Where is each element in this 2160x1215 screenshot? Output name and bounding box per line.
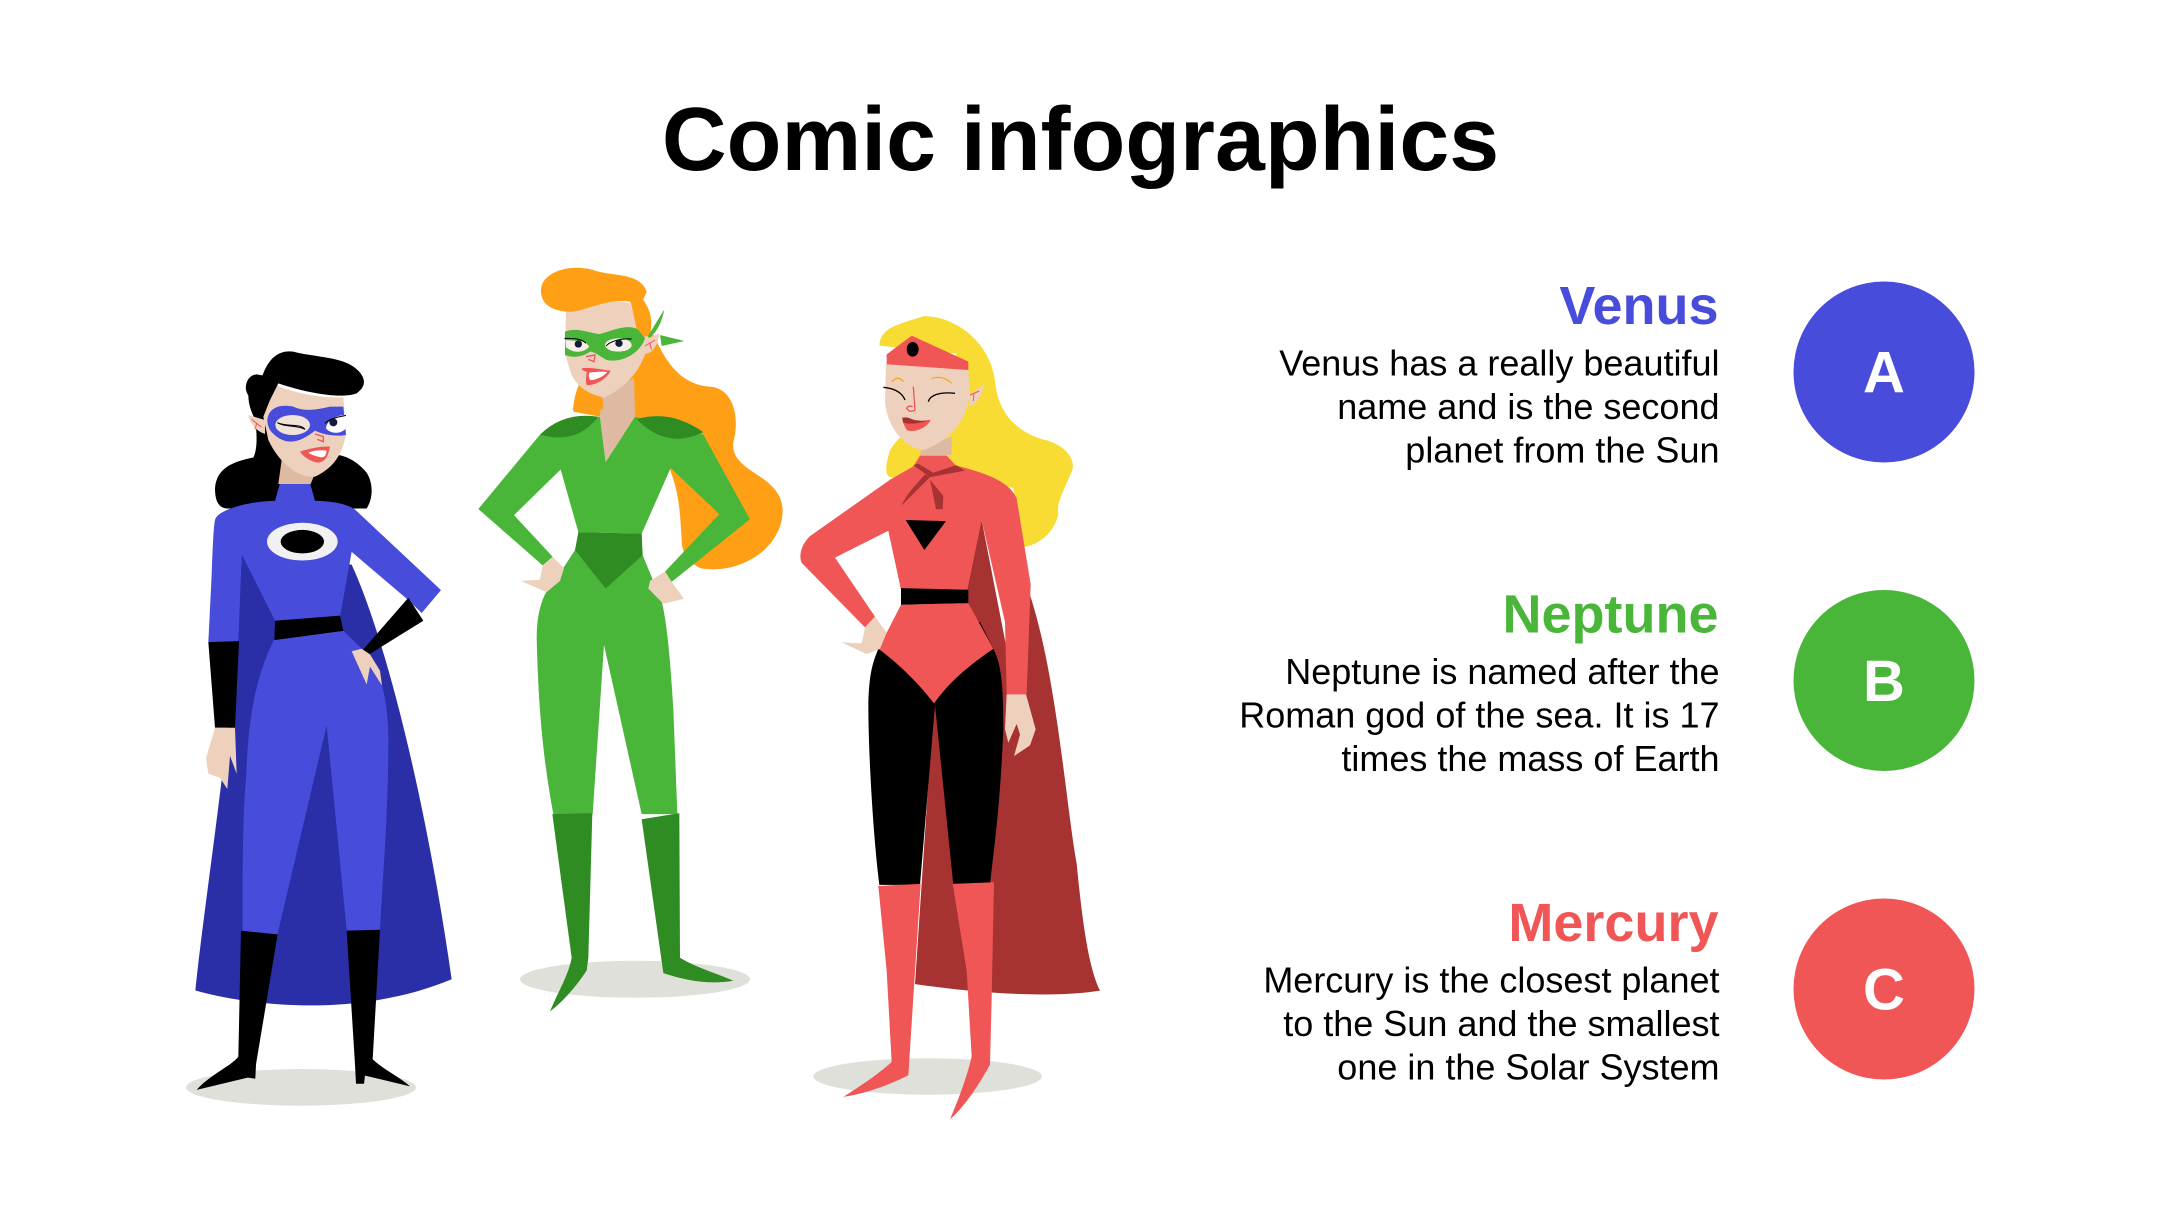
cape xyxy=(195,554,452,1005)
suit top xyxy=(208,483,441,642)
heading: Mercury xyxy=(1508,893,1718,953)
belt xyxy=(575,532,643,589)
belt xyxy=(274,616,343,640)
boots xyxy=(843,884,921,1097)
eyes xyxy=(883,387,955,402)
figure: blue superhero xyxy=(186,351,452,1106)
boots xyxy=(550,813,592,1012)
blue head xyxy=(246,351,364,484)
mouth xyxy=(582,368,611,385)
title: Comic infographics xyxy=(662,90,1499,190)
figure: green superhero xyxy=(478,268,783,1012)
scarf xyxy=(902,464,965,509)
heading: Neptune xyxy=(1502,584,1718,644)
ear xyxy=(248,415,265,434)
neck xyxy=(920,437,952,455)
ear xyxy=(645,333,659,354)
mouth xyxy=(300,447,330,463)
long hair xyxy=(879,316,1073,547)
figure: red superhero xyxy=(800,316,1100,1119)
description: Roman god of the sea. It is 17 xyxy=(1239,695,1720,736)
suit legs xyxy=(537,550,677,814)
back hair xyxy=(215,381,372,508)
belt xyxy=(901,588,968,605)
suit top xyxy=(478,417,750,582)
eyebrows xyxy=(892,377,952,383)
eyes xyxy=(275,415,310,435)
leggings xyxy=(868,622,1003,885)
ground shadow xyxy=(186,1069,416,1106)
circle badge A: A xyxy=(1863,340,1905,406)
gloves xyxy=(208,641,239,728)
hands xyxy=(842,617,887,654)
fringe xyxy=(260,351,364,407)
face xyxy=(885,364,970,450)
emblem xyxy=(267,523,338,561)
nose xyxy=(315,434,323,442)
suit hips xyxy=(878,603,993,704)
circle badge B: B xyxy=(1863,649,1905,714)
item: Mercury xyxy=(1263,893,1974,1088)
heading: Venus xyxy=(1559,276,1718,336)
mask xyxy=(267,406,346,442)
mask xyxy=(565,327,645,361)
circle badge A xyxy=(1794,282,1974,462)
headband xyxy=(887,336,968,370)
hair top xyxy=(541,268,651,337)
green head xyxy=(541,268,684,410)
description: one in the Solar System xyxy=(1337,1047,1720,1088)
circle badge C: C xyxy=(1863,958,1905,1022)
blue body xyxy=(186,381,452,1106)
red head xyxy=(883,336,984,455)
green body xyxy=(478,335,783,1012)
description: to the Sun and the smallest xyxy=(1283,1003,1720,1044)
hair bun xyxy=(246,374,273,420)
item: Venus xyxy=(1279,276,1974,471)
red body xyxy=(800,316,1100,1119)
suit top xyxy=(800,456,1031,694)
description: times the mass of Earth xyxy=(1341,738,1720,779)
description: Mercury is the closest planet xyxy=(1263,960,1720,1001)
long hair xyxy=(573,335,783,569)
hands xyxy=(521,557,564,592)
mouth xyxy=(902,418,931,431)
description: Venus has a really beautiful xyxy=(1279,343,1720,384)
face xyxy=(565,302,650,397)
ribbon xyxy=(648,309,684,346)
ear xyxy=(969,384,984,407)
shoulder pads xyxy=(540,416,598,437)
suit legs xyxy=(243,631,388,935)
item: Neptune xyxy=(1239,584,1974,779)
face xyxy=(263,385,346,477)
circle badge B xyxy=(1794,590,1974,771)
nose xyxy=(586,355,595,362)
neck v xyxy=(600,378,635,462)
chest triangle xyxy=(906,520,946,550)
eyes xyxy=(565,340,589,352)
ground shadow xyxy=(813,1058,1042,1095)
description: name and is the second xyxy=(1337,386,1720,427)
nose xyxy=(907,387,915,411)
neck xyxy=(278,460,315,484)
ground shadow xyxy=(520,961,750,998)
hands xyxy=(206,728,237,789)
description: planet from the Sun xyxy=(1405,430,1720,471)
circle badge C xyxy=(1794,898,1974,1080)
cape xyxy=(915,520,1100,994)
hair behind head xyxy=(573,383,603,410)
description: Neptune is named after the xyxy=(1285,651,1720,692)
boots xyxy=(197,931,278,1090)
